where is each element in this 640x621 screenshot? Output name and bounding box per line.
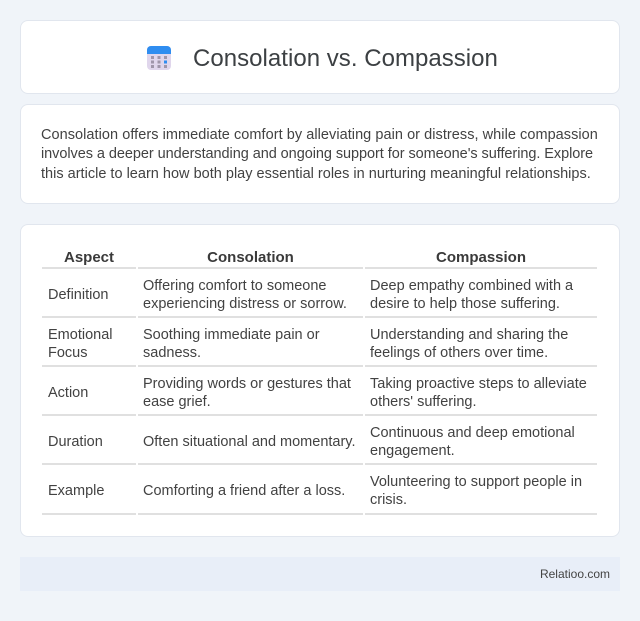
panel: title header (20, 20, 620, 94)
row: action: Providing words or gestures that (143, 376, 351, 392)
row: definition: desire to help those suffering. (370, 296, 560, 312)
panel: introduction (20, 104, 620, 204)
row: definition: Definition (48, 287, 108, 303)
title: Consolation vs. Compassion (193, 45, 498, 72)
panel: comparison table (20, 224, 620, 537)
row: duration: Duration (48, 434, 103, 450)
row: emotional focus: Focus (48, 345, 88, 361)
footer bar (20, 557, 620, 591)
row: duration (48, 425, 575, 459)
row: action: Action (48, 385, 88, 401)
row: example (48, 474, 582, 508)
row: action: Taking proactive steps to alleviate (370, 376, 587, 392)
row: emotional focus: feelings of others over time. (370, 345, 548, 361)
footer text: Relatioo.com (540, 567, 610, 581)
row: example: Example (48, 483, 104, 499)
row: example: Volunteering to support people in (370, 474, 582, 490)
row: definition: experiencing distress or sorrow. (143, 296, 347, 312)
text: introduction: Consolation offers immediate comfort by alleviating pain or distress, while compassion (41, 126, 598, 142)
row: emotional focus: Understanding and sharing the (370, 327, 568, 343)
row: definition: Offering comfort to someone (143, 278, 326, 294)
row: action (48, 376, 587, 410)
row: duration: engagement. (370, 443, 455, 459)
column headers: Consolation (207, 249, 294, 266)
row: emotional focus: Emotional (48, 327, 112, 343)
row: definition: Deep empathy combined with a (370, 278, 573, 294)
column headers: Compassion (436, 249, 526, 266)
column headers: Aspect (64, 249, 114, 266)
row: definition (48, 278, 574, 312)
row: duration: Often situational and momentary. (143, 434, 356, 450)
text: introduction: this article to learn how both play essential roles in nurturing meaningful relationships. (41, 166, 591, 182)
row: emotional focus: Soothing immediate pain or (143, 327, 320, 343)
row: action: others' suffering. (370, 394, 476, 410)
text: introduction: involves a deeper understanding and ongoing support for someone's suffering. Explore (41, 146, 593, 162)
row: example: Comforting a friend after a loss. (143, 483, 345, 499)
table: comparison (42, 249, 597, 515)
row: emotional focus (48, 327, 568, 361)
row: duration: Continuous and deep emotional (370, 425, 575, 441)
row: action: ease grief. (143, 394, 211, 410)
column headers (64, 249, 526, 266)
text: introduction (41, 126, 598, 182)
row: emotional focus: sadness. (143, 345, 201, 361)
row: example: crisis. (370, 492, 407, 508)
icon: calendar (147, 46, 171, 70)
